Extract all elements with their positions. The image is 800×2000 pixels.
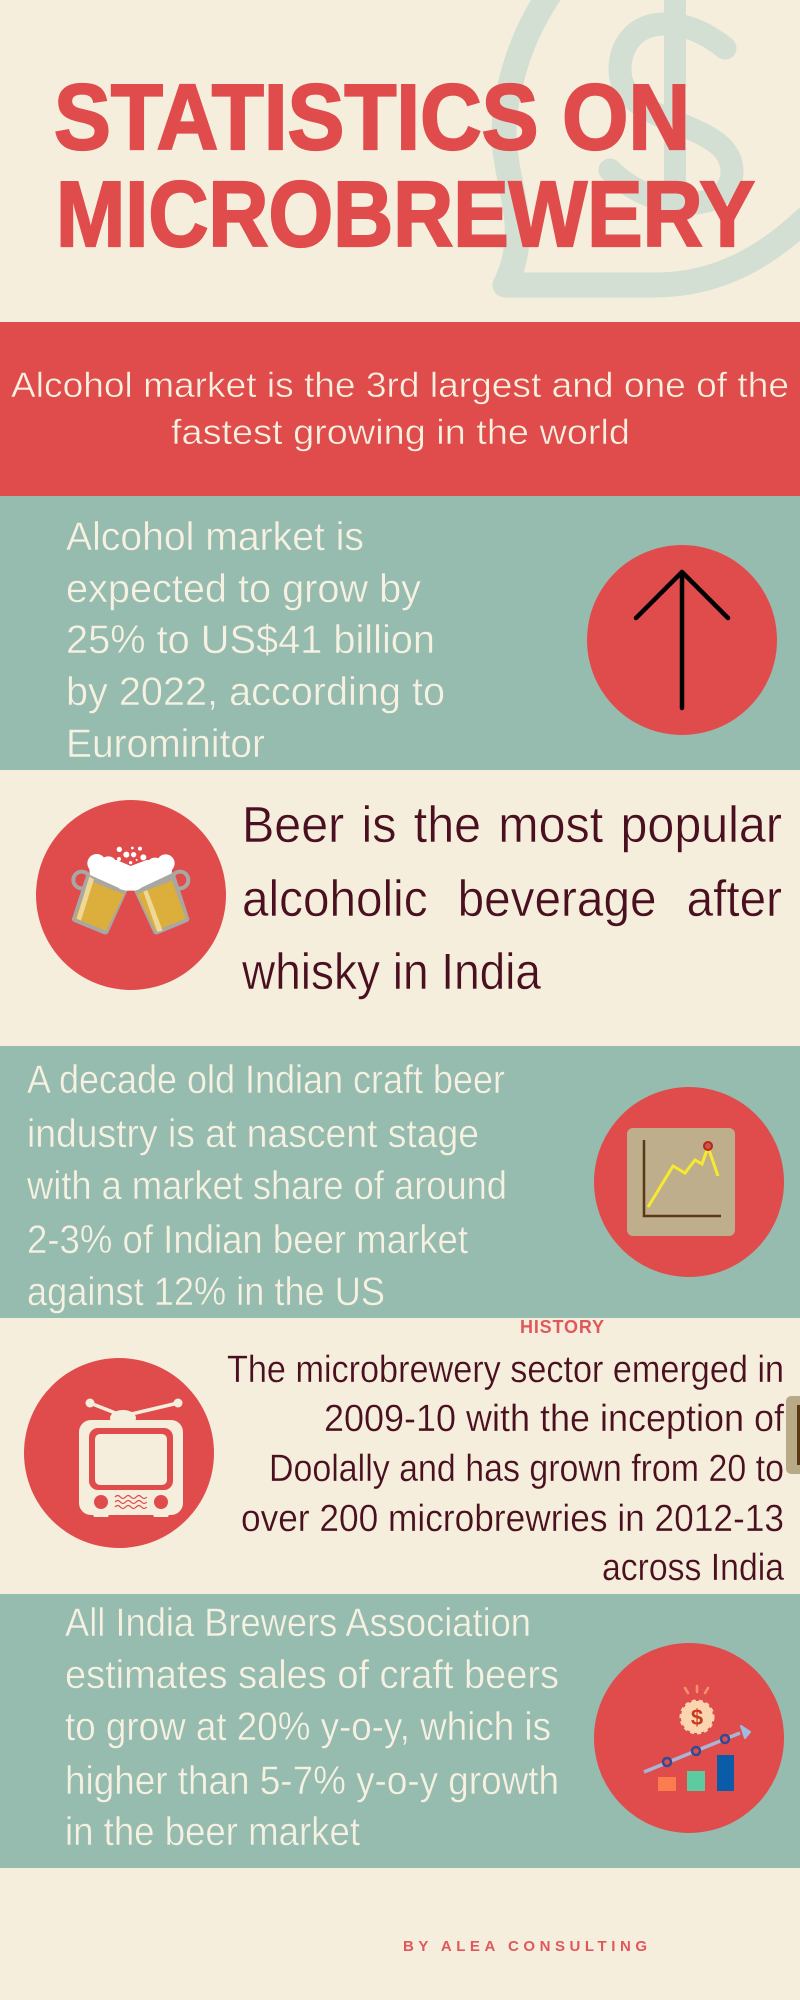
text: market share: A decade old Indian craft beer — [27, 1058, 505, 1102]
text: beer popularity: Beer is the most popular — [242, 796, 782, 853]
text: growth forecast: Alcohol market is — [66, 515, 364, 559]
text: growth forecast: Eurominitor — [66, 722, 265, 766]
icon: line chart — [594, 1087, 784, 1277]
text: sales growth: in the beer market — [65, 1810, 360, 1854]
text: market share: with a market share of around — [26, 1164, 507, 1208]
text: beer popularity — [241, 796, 782, 1000]
panel: craft beer sales growth — [0, 1594, 800, 1868]
text: sales growth: All India Brewers Association — [65, 1601, 531, 1645]
text: history of the sector — [227, 1349, 785, 1589]
panel: alcohol market rank banner: Alcohol market is the 3rd largest and one of the — [11, 366, 789, 405]
title: STATISTICS ON — [54, 65, 690, 169]
text: sales growth — [65, 1601, 559, 1854]
panel: beer popularity — [36, 796, 782, 1000]
text: history of the sector: 2009-10 with the inception of — [324, 1398, 784, 1440]
text: growth forecast: expected to grow by — [66, 567, 421, 611]
icon: growth bar chart with dollar badge — [594, 1643, 784, 1833]
text: market share — [26, 1058, 507, 1314]
text: growth forecast — [66, 515, 445, 766]
icon: up arrow — [587, 545, 777, 735]
text: sales growth: estimates sales of craft beers — [65, 1653, 559, 1697]
text: sales growth: higher than 5-7% y-o-y growth — [65, 1759, 559, 1803]
text: growth forecast: 25% to US$41 billion — [66, 618, 435, 662]
panel: alcohol market rank banner — [0, 322, 800, 496]
panel: microbrewery history — [24, 1349, 785, 1589]
panel: alcohol market rank banner: fastest growing in the world — [171, 413, 630, 452]
heading: history: HISTORY — [520, 1317, 604, 1337]
decorative dollar coin watermark — [504, 0, 800, 285]
icon: clinking beer mugs — [36, 800, 226, 990]
side fragment: cropped tan panel — [786, 1396, 800, 1474]
panel: market growth forecast — [0, 496, 800, 770]
text: beer popularity: whisky in India — [241, 943, 542, 1000]
icon: retro television — [24, 1358, 214, 1548]
icon: growth bar chart with dollar badge: $ — [691, 1705, 703, 1730]
text: market share: 2-3% of Indian beer market — [27, 1218, 468, 1262]
footer credit: BY ALEA CONSULTING — [403, 1938, 647, 1955]
panel: craft beer market share — [0, 1046, 800, 1318]
text: growth forecast: by 2022, according to — [66, 670, 445, 714]
text: sales growth: to grow at 20% y-o-y, which is — [65, 1705, 551, 1749]
text: market share: industry is at nascent stage — [27, 1112, 479, 1156]
title — [54, 65, 755, 266]
text: market share: against 12% in the US — [27, 1270, 385, 1314]
